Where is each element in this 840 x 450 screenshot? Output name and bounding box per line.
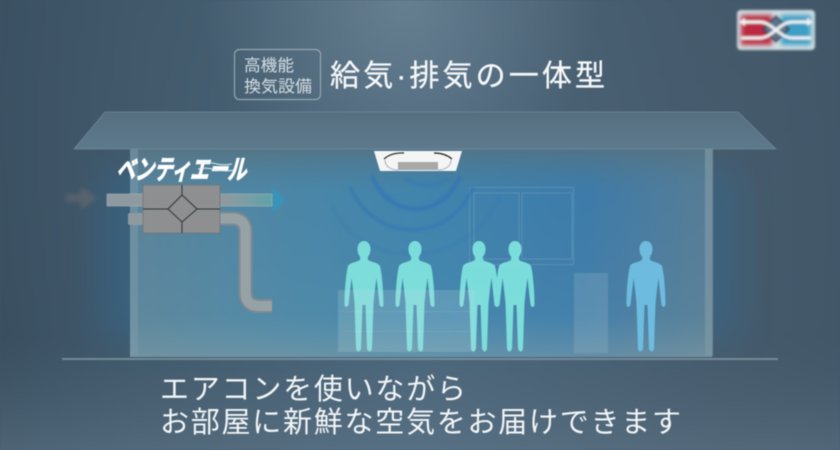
exchanger body	[143, 185, 220, 233]
exchanger lines	[143, 185, 220, 233]
upper duct	[107, 194, 272, 206]
room shading	[130, 149, 712, 357]
floor	[62, 358, 778, 360]
icon: air exchange badge	[737, 10, 815, 50]
left wall	[130, 149, 138, 356]
ventilation unit	[107, 185, 272, 306]
title label box: 高機能	[244, 56, 294, 75]
house	[62, 112, 778, 360]
air conditioner cassette	[374, 151, 462, 171]
air conditioner airflow waves	[332, 176, 500, 254]
furniture: counter	[574, 273, 608, 353]
title label box	[234, 50, 320, 100]
person 3	[460, 241, 498, 352]
arrow: intake	[66, 186, 97, 210]
arrow: exhaust	[272, 187, 286, 213]
roof	[74, 112, 776, 149]
lower left duct	[128, 213, 153, 225]
window	[470, 188, 574, 264]
person 5	[626, 241, 666, 352]
caption	[160, 373, 681, 439]
person 2	[396, 241, 434, 352]
caption line 1: エアコンを使いながら	[160, 373, 466, 406]
room interior	[130, 149, 712, 357]
right wall	[705, 149, 713, 356]
logo: ventiair: ベンティエール	[115, 154, 252, 185]
caption line 2: お部屋に新鮮な空気をお届けできます	[160, 406, 681, 439]
person 1	[344, 241, 384, 352]
person 4	[496, 241, 534, 352]
supply duct	[215, 218, 272, 306]
title label box: 換気設備	[244, 77, 312, 96]
people	[344, 241, 666, 352]
title: 給気·排気の一体型	[330, 60, 605, 93]
furniture: sofa	[338, 290, 475, 352]
